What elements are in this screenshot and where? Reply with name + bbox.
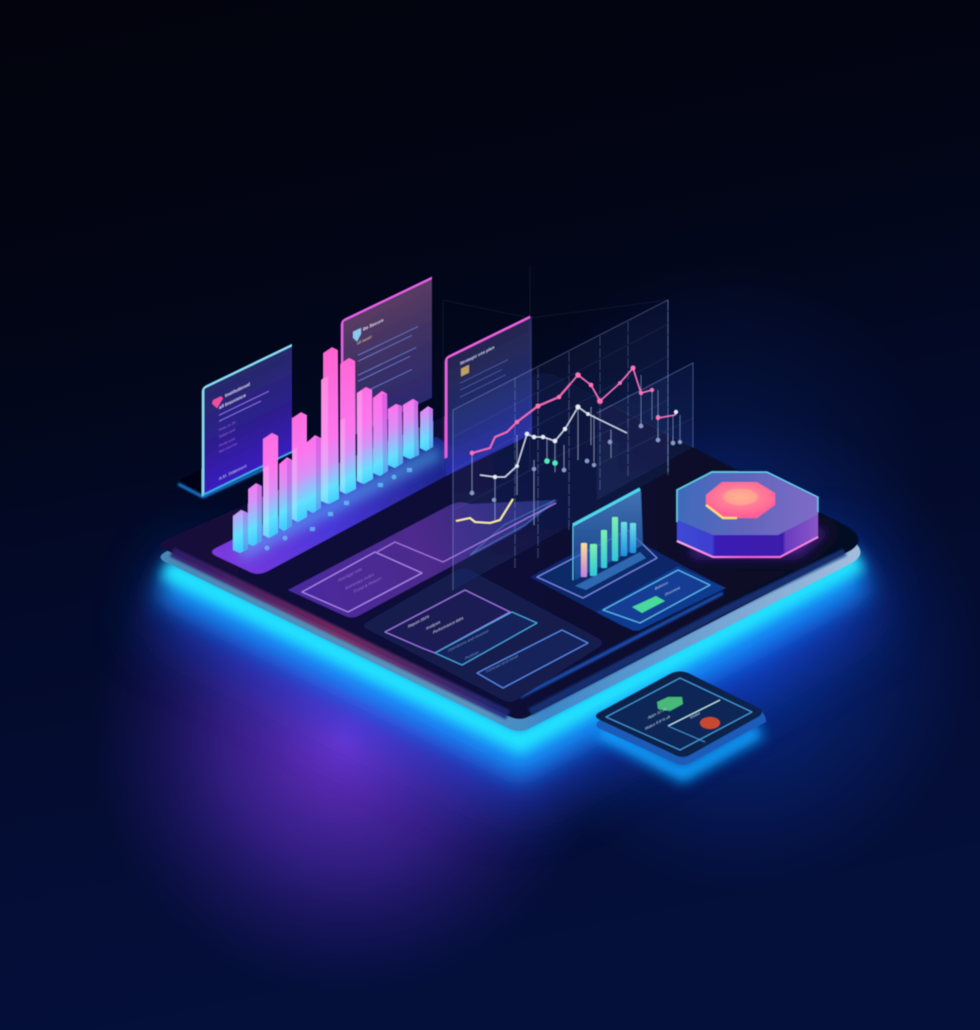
line chart: pink series	[470, 365, 676, 455]
left info card	[178, 345, 292, 497]
line chart: teal markers	[544, 458, 558, 466]
summary card caption	[338, 566, 382, 594]
summary card caption: Fund & Return	[354, 575, 382, 594]
report text: Report 2024	[408, 613, 430, 629]
card body text	[219, 420, 237, 454]
card body text: Profit cost	[219, 436, 236, 448]
panel: navy report panel	[364, 569, 602, 702]
summary card outlines	[302, 503, 556, 612]
metrics tile: data	[596, 566, 726, 631]
phone red dot	[700, 717, 720, 729]
tablet side rim	[160, 386, 861, 731]
line chart: stem end dots	[470, 415, 682, 502]
card title: all Insurance	[219, 392, 246, 410]
octagonal button block	[677, 472, 830, 557]
card title: Be Secure	[363, 317, 384, 332]
card body text: Net income	[219, 442, 237, 454]
phone labels: Status 5.8 % ok	[645, 715, 670, 731]
line chart: yellow series	[456, 499, 513, 523]
metrics tile: data: Overview	[665, 586, 680, 597]
metrics outline: chart tile	[537, 530, 657, 598]
card icon: gem	[212, 395, 223, 411]
card title: all asset	[357, 334, 372, 346]
phone labels: Apps 12:34	[648, 707, 666, 720]
tablet top surface	[160, 374, 859, 719]
chart platform under bars	[212, 437, 476, 574]
card icon: shield	[353, 328, 361, 344]
metrics tile: data: Balance	[655, 581, 668, 591]
panel: blue metrics panel	[530, 530, 726, 631]
report text: Portfolio	[465, 649, 480, 661]
bar highlights	[263, 376, 362, 538]
report outline: lower block	[477, 630, 588, 688]
bar chart: pink to cyan columns	[233, 347, 433, 553]
mini bar card	[573, 489, 646, 590]
panel: purple summary panel	[288, 500, 558, 618]
card title: Strategic use plan	[460, 344, 495, 366]
report text: Operations and revenue	[448, 628, 489, 653]
phone screen	[596, 672, 762, 757]
report text	[408, 613, 518, 674]
report text: Performance data	[433, 615, 464, 635]
report text: Forecast and trend	[486, 653, 518, 674]
phone green chip	[657, 697, 683, 711]
summary card caption: Average rate	[338, 566, 362, 583]
phone labels	[645, 707, 701, 731]
translucent chart sheets	[443, 265, 693, 590]
report outline: header block	[385, 590, 510, 653]
middle info card	[342, 278, 432, 441]
phone device	[596, 672, 766, 774]
report outline: row block	[435, 612, 537, 665]
card title	[357, 317, 384, 346]
card icon: tag	[461, 365, 469, 377]
pink button	[706, 482, 775, 518]
summary card caption: Summary index	[345, 571, 375, 591]
card title	[219, 382, 250, 410]
card title: Institutional	[225, 382, 250, 398]
line chart: drop stems	[472, 375, 680, 525]
octagon top face	[677, 472, 818, 535]
card footer: A.M. Statement	[219, 463, 247, 481]
card body text: Rate to 26	[219, 420, 236, 432]
card body text: Sales and	[219, 428, 235, 439]
mini bars	[581, 517, 636, 577]
tablet base	[160, 374, 861, 731]
line chart: white series	[480, 405, 678, 479]
third info card	[446, 316, 532, 476]
report text: Analysis	[426, 619, 440, 631]
platform icons	[265, 468, 412, 550]
phone labels: Wallet	[690, 711, 701, 720]
bar right-side shade	[243, 394, 433, 551]
platform glow	[240, 452, 440, 553]
